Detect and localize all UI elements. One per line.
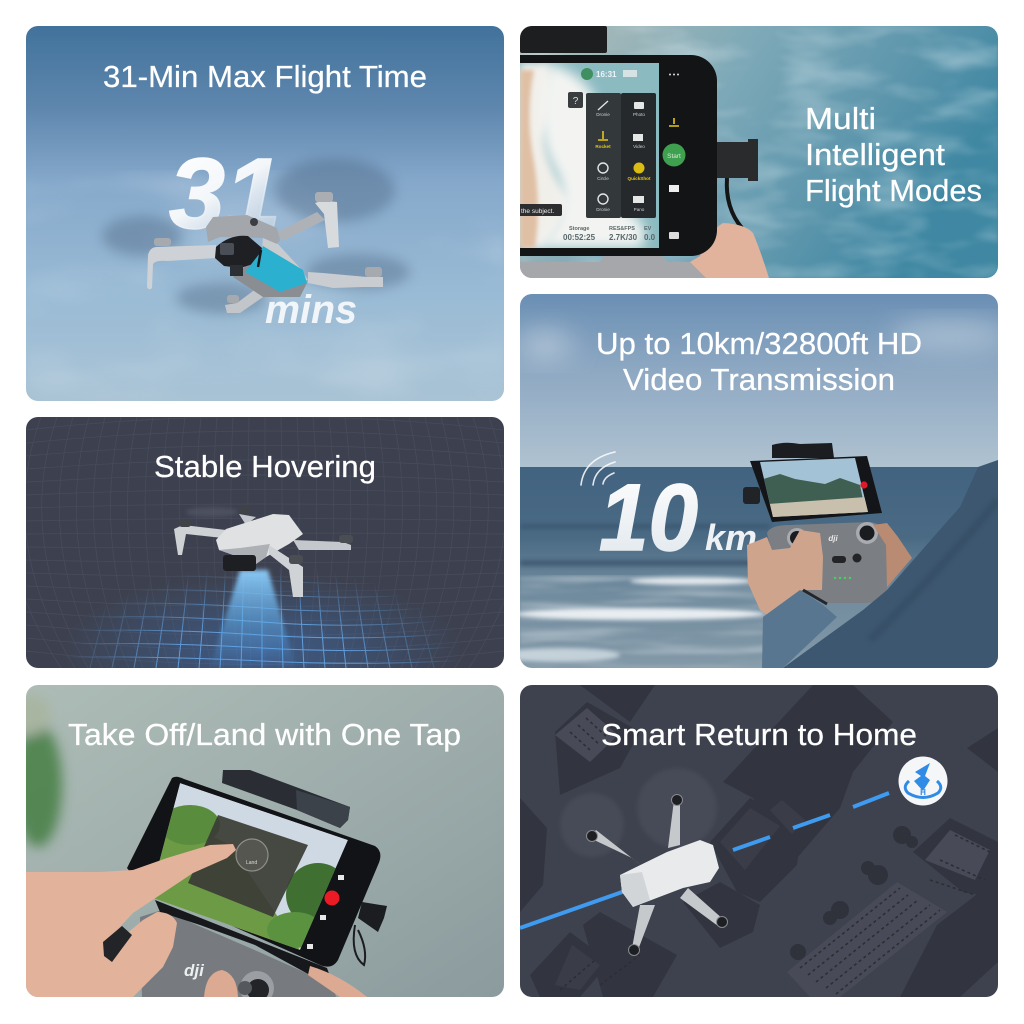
other fingers bbox=[204, 966, 367, 997]
title: Multi bbox=[805, 101, 876, 136]
ocean foam texture bbox=[520, 26, 998, 278]
dark background bbox=[520, 685, 998, 997]
phone screen: Pano bbox=[634, 207, 645, 212]
cable bbox=[727, 178, 742, 228]
phone screen: Land bbox=[246, 860, 257, 866]
drone illustration: return bbox=[586, 794, 728, 956]
side clamp bbox=[717, 139, 758, 181]
perspective grid bbox=[8, 416, 522, 668]
phone screen: 16:31 bbox=[596, 70, 617, 79]
title: Take Off/Land with One Tap bbox=[68, 717, 461, 752]
title: 31-Min Max Flight Time bbox=[103, 59, 427, 94]
holder bar bottom bbox=[520, 256, 706, 278]
tooltip bbox=[520, 204, 562, 216]
hand bbox=[690, 223, 769, 278]
sea bbox=[520, 467, 998, 668]
phone screen bbox=[150, 783, 350, 950]
mode menu bbox=[586, 93, 621, 218]
landing dialog bbox=[188, 815, 308, 917]
joystick right bbox=[238, 971, 274, 1005]
telemetry bbox=[563, 226, 655, 240]
phone screen: the subject. bbox=[521, 208, 554, 215]
big number 31: 31 bbox=[169, 138, 281, 250]
phone screen: QuickShot bbox=[628, 176, 651, 181]
side clamp and cable bbox=[354, 902, 387, 965]
ocean background bbox=[520, 26, 998, 278]
propeller blur discs bbox=[102, 158, 410, 314]
camera bbox=[223, 555, 256, 571]
dark background bbox=[26, 417, 504, 668]
title: Intelligent bbox=[805, 137, 945, 172]
phone screen: Rocket bbox=[595, 144, 611, 149]
remote controller with phone: dji bbox=[828, 534, 838, 543]
light beam bbox=[210, 570, 296, 668]
title: Flight Modes bbox=[805, 173, 982, 208]
10 km label: 10 bbox=[599, 465, 698, 571]
camera controls bbox=[662, 74, 686, 239]
telemetry: RES&FPS bbox=[609, 226, 635, 232]
phone body bbox=[520, 55, 717, 256]
phone screen: ? bbox=[573, 96, 579, 107]
remote controller with phone bbox=[743, 443, 887, 603]
clouds bbox=[26, 170, 504, 401]
phone screen: Circle bbox=[597, 176, 609, 181]
blurred foliage bbox=[10, 695, 62, 847]
phone cradle bbox=[155, 900, 333, 985]
phone screen: Photo bbox=[633, 112, 645, 117]
sky background bbox=[26, 26, 504, 401]
flight path bbox=[520, 793, 889, 928]
signal arcs icon bbox=[581, 452, 615, 485]
phone body bbox=[127, 777, 380, 967]
phone clamp top bbox=[520, 26, 607, 53]
telemetry: 0.0 bbox=[644, 233, 656, 242]
telemetry: EV bbox=[644, 226, 652, 232]
record button bbox=[324, 890, 340, 906]
return home icon bbox=[898, 756, 948, 806]
phone screen: Video bbox=[633, 144, 645, 149]
status bar bbox=[581, 68, 593, 80]
telemetry: Storage bbox=[569, 226, 589, 232]
title: Stable Hovering bbox=[154, 449, 376, 484]
background bbox=[26, 685, 504, 997]
battery highlight bbox=[245, 246, 307, 292]
blue glow bbox=[92, 586, 433, 668]
title: Up to 10km/32800ft HD bbox=[596, 326, 922, 361]
jacket sleeves bbox=[762, 460, 998, 668]
drone illustration: hovering bbox=[174, 505, 353, 597]
panel: stable hovering bbox=[26, 417, 504, 668]
title bbox=[805, 101, 982, 208]
10 km label: km bbox=[705, 517, 757, 558]
telemetry: 2.7K/30 bbox=[609, 233, 638, 242]
phone screen: Dronie bbox=[596, 112, 610, 117]
controller bbox=[140, 910, 336, 997]
panel: smart return to home bbox=[520, 685, 998, 997]
camera controls: Start bbox=[667, 153, 681, 160]
hands bbox=[747, 523, 912, 617]
title bbox=[596, 326, 922, 397]
return home icon: H bbox=[920, 788, 926, 797]
isometric city buildings bbox=[520, 685, 998, 997]
dji logo: dji bbox=[184, 961, 205, 980]
panel: video transmission bbox=[500, 294, 1010, 668]
panel: multi intelligent flight modes bbox=[470, 26, 998, 278]
phone clamp bbox=[222, 770, 350, 828]
phone screen bbox=[515, 63, 659, 248]
drone illustration: flight time bbox=[147, 192, 383, 313]
mins label: mins bbox=[265, 288, 357, 332]
left stick bbox=[103, 926, 132, 962]
title: Video Transmission bbox=[623, 362, 895, 397]
haze clouds bbox=[517, 323, 1010, 359]
sky bbox=[520, 294, 998, 470]
10 km label bbox=[599, 465, 757, 571]
panel: take off and land bbox=[10, 685, 504, 1005]
panel: 31-min max flight time bbox=[26, 26, 504, 401]
gimbal camera bbox=[215, 236, 262, 268]
title: Smart Return to Home bbox=[601, 717, 917, 752]
propeller discs bbox=[560, 768, 717, 857]
phone screen: Dronie bbox=[596, 207, 610, 212]
sidebar icons bbox=[307, 875, 344, 949]
hand left bbox=[26, 844, 236, 997]
waves bbox=[500, 524, 770, 668]
telemetry: 00:52:25 bbox=[563, 233, 596, 242]
blue floor grid bbox=[71, 568, 454, 668]
